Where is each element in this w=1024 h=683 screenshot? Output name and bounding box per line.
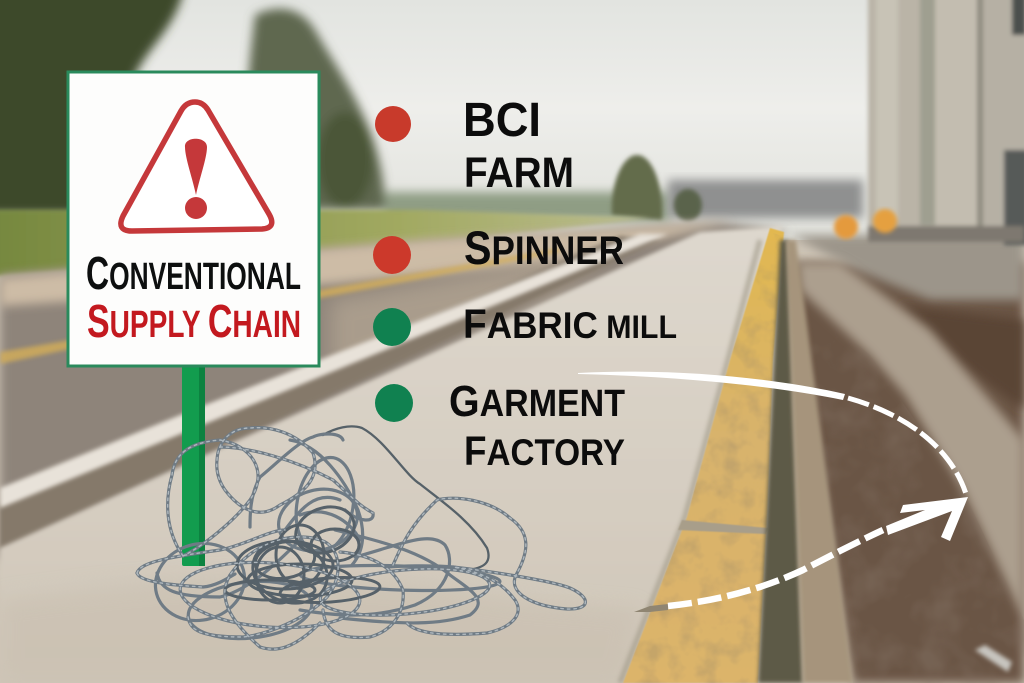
legend: supply chain stages [373, 94, 677, 474]
sidewalk [0, 226, 782, 683]
trees left [0, 0, 670, 222]
icon: warning triangle [121, 102, 272, 231]
dashed curved return arrow [578, 372, 968, 612]
road shoulder [0, 222, 730, 306]
tangled grey rope [137, 426, 585, 649]
arrow upper dashes [848, 398, 967, 497]
far road tone [330, 246, 620, 375]
arrow head [886, 497, 968, 541]
sky [0, 0, 1024, 240]
label: garment factory: GARMENT [449, 377, 642, 426]
concrete strip [786, 240, 853, 683]
dot: BCI farm [375, 106, 411, 142]
debris [975, 645, 1012, 672]
label: fabric mill: FABRIC MILL [463, 301, 677, 347]
curb joint [678, 520, 768, 534]
dark upper right soil [900, 305, 1024, 410]
yellow line [0, 248, 560, 364]
rope dense core [225, 499, 381, 613]
soil base [790, 262, 1024, 683]
sign text: conventional: CONVENTIONAL [86, 247, 301, 299]
sign text: supply chain: SUPPLY CHAIN [87, 295, 301, 347]
green sign post [182, 365, 205, 566]
label: spinner: SPINNER [464, 221, 624, 274]
concrete path right [797, 262, 1024, 620]
distant tree [612, 155, 702, 221]
upper right ground [790, 235, 1024, 300]
sign board [68, 72, 319, 366]
brown band under stripe [0, 236, 660, 550]
label: BCI farm: BCI [463, 94, 541, 147]
road [0, 222, 790, 560]
white stripe [0, 234, 668, 508]
building [868, 0, 1024, 245]
label: garment factory: FACTORY [464, 428, 641, 474]
dot: fabric mill [373, 308, 411, 346]
arrow lower dashes [668, 530, 883, 606]
soil mottling [803, 300, 1024, 683]
sidewalk shading [0, 577, 640, 683]
yellow curb [623, 228, 784, 683]
label: BCI farm: FARM [464, 149, 574, 197]
curb mottling [623, 232, 782, 683]
dot: garment factory [375, 384, 413, 422]
rope base strokes [137, 426, 585, 649]
distant building [668, 180, 863, 218]
rope highlights [137, 428, 585, 649]
dot: spinner [373, 236, 411, 274]
warning sign panel [68, 72, 319, 366]
curb shadow line [620, 240, 760, 683]
grass [0, 210, 650, 276]
orange lights [834, 209, 897, 239]
arrow smudge [634, 604, 668, 612]
arrow solid tail [578, 372, 845, 400]
dark gutter [758, 240, 803, 683]
